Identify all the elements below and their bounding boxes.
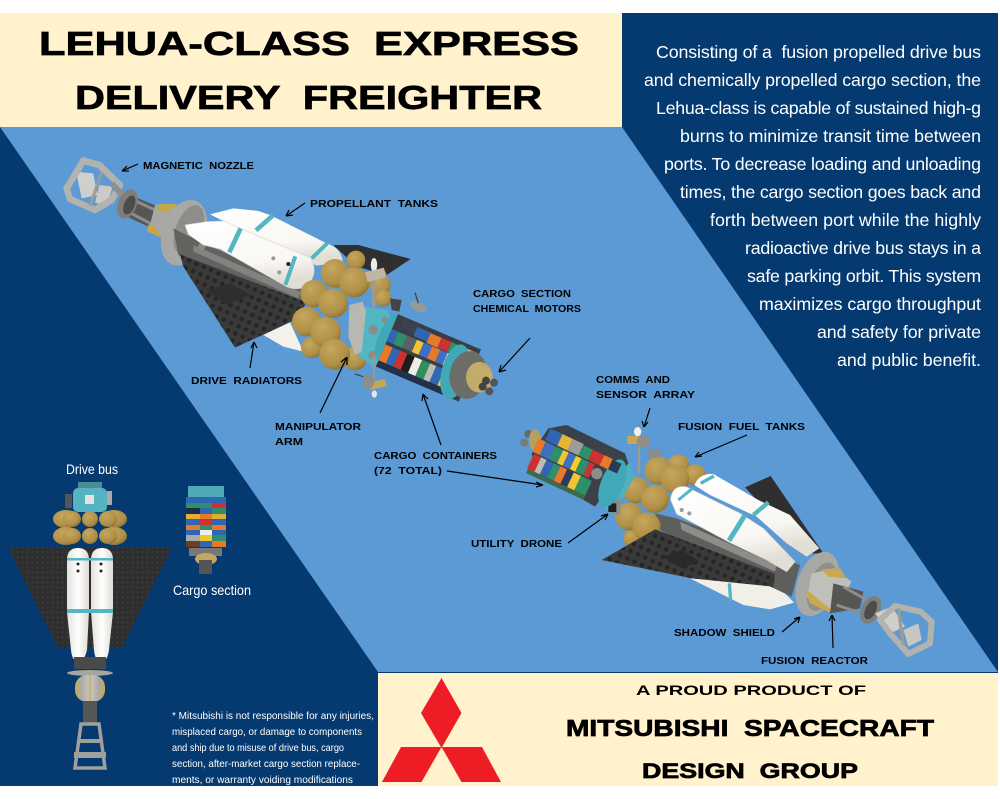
drive bus top view	[8, 482, 172, 768]
tank details	[76, 562, 102, 572]
label: drive radiators: DRIVE RADIATORS	[191, 376, 302, 387]
drive bus label: Drive bus	[66, 461, 118, 477]
footer text: DESIGN GROUP	[642, 760, 858, 783]
cargo hull	[532, 425, 628, 507]
footer text	[566, 682, 934, 783]
propellant tanks	[67, 548, 113, 660]
front fuel tank	[671, 486, 795, 572]
chemical motors	[520, 429, 541, 451]
description paragraph: safe parking orbit. This system	[747, 266, 981, 286]
upper propellant tank	[210, 208, 343, 266]
lower propellant tank	[263, 322, 303, 352]
magnetic nozzle	[875, 606, 932, 654]
fusion reactor	[147, 204, 178, 238]
description paragraph: maximizes cargo throughput	[759, 294, 981, 314]
description paragraph: ports. To decrease loading and unloading	[664, 154, 981, 174]
rear end: nozzle, reactor, shield	[67, 161, 216, 272]
teal ring	[592, 456, 632, 511]
footer banner	[378, 673, 998, 786]
tanks, truss, radiators	[602, 454, 823, 609]
drive radiator	[180, 254, 307, 348]
shadow shield	[787, 546, 848, 622]
fuel spheres	[292, 251, 392, 370]
spheres behind tanks	[615, 454, 706, 547]
background: blue diagonal band	[0, 127, 998, 672]
label: cargo containers: CARGO CONTAINERS	[374, 451, 497, 462]
label: drive radiators	[191, 342, 302, 387]
keel	[74, 657, 106, 669]
description paragraph: radioactive drive bus stays in a	[745, 238, 981, 258]
lower fuel tank	[690, 578, 794, 609]
radiators	[8, 547, 172, 648]
title text: DELIVERY FREIGHTER	[75, 79, 542, 116]
description paragraph: Consisting of a fusion propelled drive bus	[656, 42, 981, 62]
label: manipulator arm: MANIPULATOR	[275, 422, 362, 433]
label: fusion fuel tanks	[678, 422, 805, 457]
truss	[173, 221, 305, 302]
description paragraph: forth between port while the highly	[710, 210, 981, 230]
cargo section label: Cargo section	[173, 582, 251, 598]
comms mast and dish	[365, 258, 386, 305]
truss	[655, 513, 800, 597]
label: propellant tanks	[286, 199, 438, 216]
title text	[39, 25, 579, 116]
label: cargo section chemical motors	[473, 289, 581, 372]
label: fusion reactor	[761, 615, 869, 667]
drive module and cargo section	[520, 425, 662, 517]
sensor array	[355, 268, 428, 398]
disclaimer: and ship due to misuse of drive bus, cargo	[172, 743, 344, 754]
cargo section top view	[186, 486, 226, 574]
teal drive module	[352, 307, 397, 367]
footer text: A PROUD PRODUCT OF	[636, 682, 867, 698]
teal drive module	[598, 460, 635, 517]
label: fusion reactor: FUSION REACTOR	[761, 656, 869, 667]
fuel spheres	[53, 510, 127, 545]
label: utility drone: UTILITY DRONE	[471, 539, 562, 550]
disclaimer: ments, or warranty voiding modifications	[172, 775, 353, 786]
label: cargo section chemical motors: CARGO SECTION	[473, 289, 571, 300]
fusion reactor	[805, 568, 852, 614]
label: comms and sensor array	[596, 375, 695, 427]
label: cargo section chemical motors: CHEMICAL MOTORS	[473, 304, 581, 315]
disclaimer: section, after-market cargo section replace-	[172, 759, 360, 770]
label: cargo containers: (72 TOTAL)	[374, 466, 442, 477]
tank bands	[67, 558, 113, 613]
manipulator arm	[348, 302, 366, 355]
rear radiator	[745, 476, 823, 553]
Mitsubishi logo	[382, 678, 501, 782]
label: comms and sensor array: SENSOR ARRAY	[596, 390, 695, 401]
description paragraph: and safety for private	[817, 322, 981, 342]
description paragraph: times, the cargo section goes back and	[680, 182, 981, 202]
container rows	[186, 497, 226, 547]
tanks, truss and radiators	[173, 208, 411, 370]
rear radiator	[333, 245, 411, 275]
front propellant tank	[185, 221, 314, 289]
cargo section chemical motors	[435, 341, 498, 402]
title banner	[0, 13, 622, 127]
drive module and cargo section	[348, 268, 498, 402]
rear end	[787, 546, 932, 654]
description paragraph: and public benefit.	[837, 350, 981, 370]
label: manipulator arm	[275, 357, 362, 448]
label: fusion fuel tanks: FUSION FUEL TANKS	[678, 422, 805, 433]
disclaimer	[172, 711, 374, 786]
rear fuel tank	[694, 474, 819, 557]
label: shadow shield: SHADOW SHIELD	[674, 628, 775, 639]
description paragraph: Lehua-class is capable of sustained high-g	[656, 98, 981, 118]
cargo containers	[523, 426, 622, 508]
stem	[83, 701, 97, 725]
description paragraph: and chemically propelled cargo section, the	[644, 70, 981, 90]
label: shadow shield	[674, 617, 800, 639]
struts and ring	[113, 186, 158, 227]
label: comms and sensor array: COMMS AND	[596, 375, 670, 386]
label: propellant tanks: PROPELLANT TANKS	[310, 199, 438, 210]
shadow shield	[152, 193, 216, 272]
footer text: MITSUBISHI SPACECRAFT	[566, 715, 934, 741]
struts and ring	[830, 583, 885, 627]
comms and sensor array	[627, 427, 662, 473]
nozzle	[74, 724, 106, 768]
label: utility drone	[471, 514, 608, 550]
cargo containers	[376, 314, 481, 402]
teal module	[65, 482, 112, 512]
drive radiator	[602, 529, 775, 587]
description paragraph	[644, 42, 981, 370]
label: cargo containers	[374, 394, 543, 487]
shadow shield	[67, 670, 113, 676]
ship render: lower-right freighter	[520, 425, 932, 654]
disclaimer: * Mitsubishi is not responsible for any injuries,	[172, 711, 374, 722]
teal ring	[369, 309, 411, 366]
description paragraph: burns to minimize transit time between	[680, 126, 981, 146]
ship render: top-left freighter	[67, 161, 498, 402]
reactor	[75, 675, 105, 702]
title text: LEHUA-CLASS EXPRESS	[39, 25, 579, 62]
label: manipulator arm: ARM	[275, 437, 303, 448]
disclaimer: misplaced cargo, or damage to components	[172, 727, 362, 738]
label: magnetic nozzle: MAGNETIC NOZZLE	[143, 161, 254, 172]
magnetic nozzle	[67, 161, 127, 210]
